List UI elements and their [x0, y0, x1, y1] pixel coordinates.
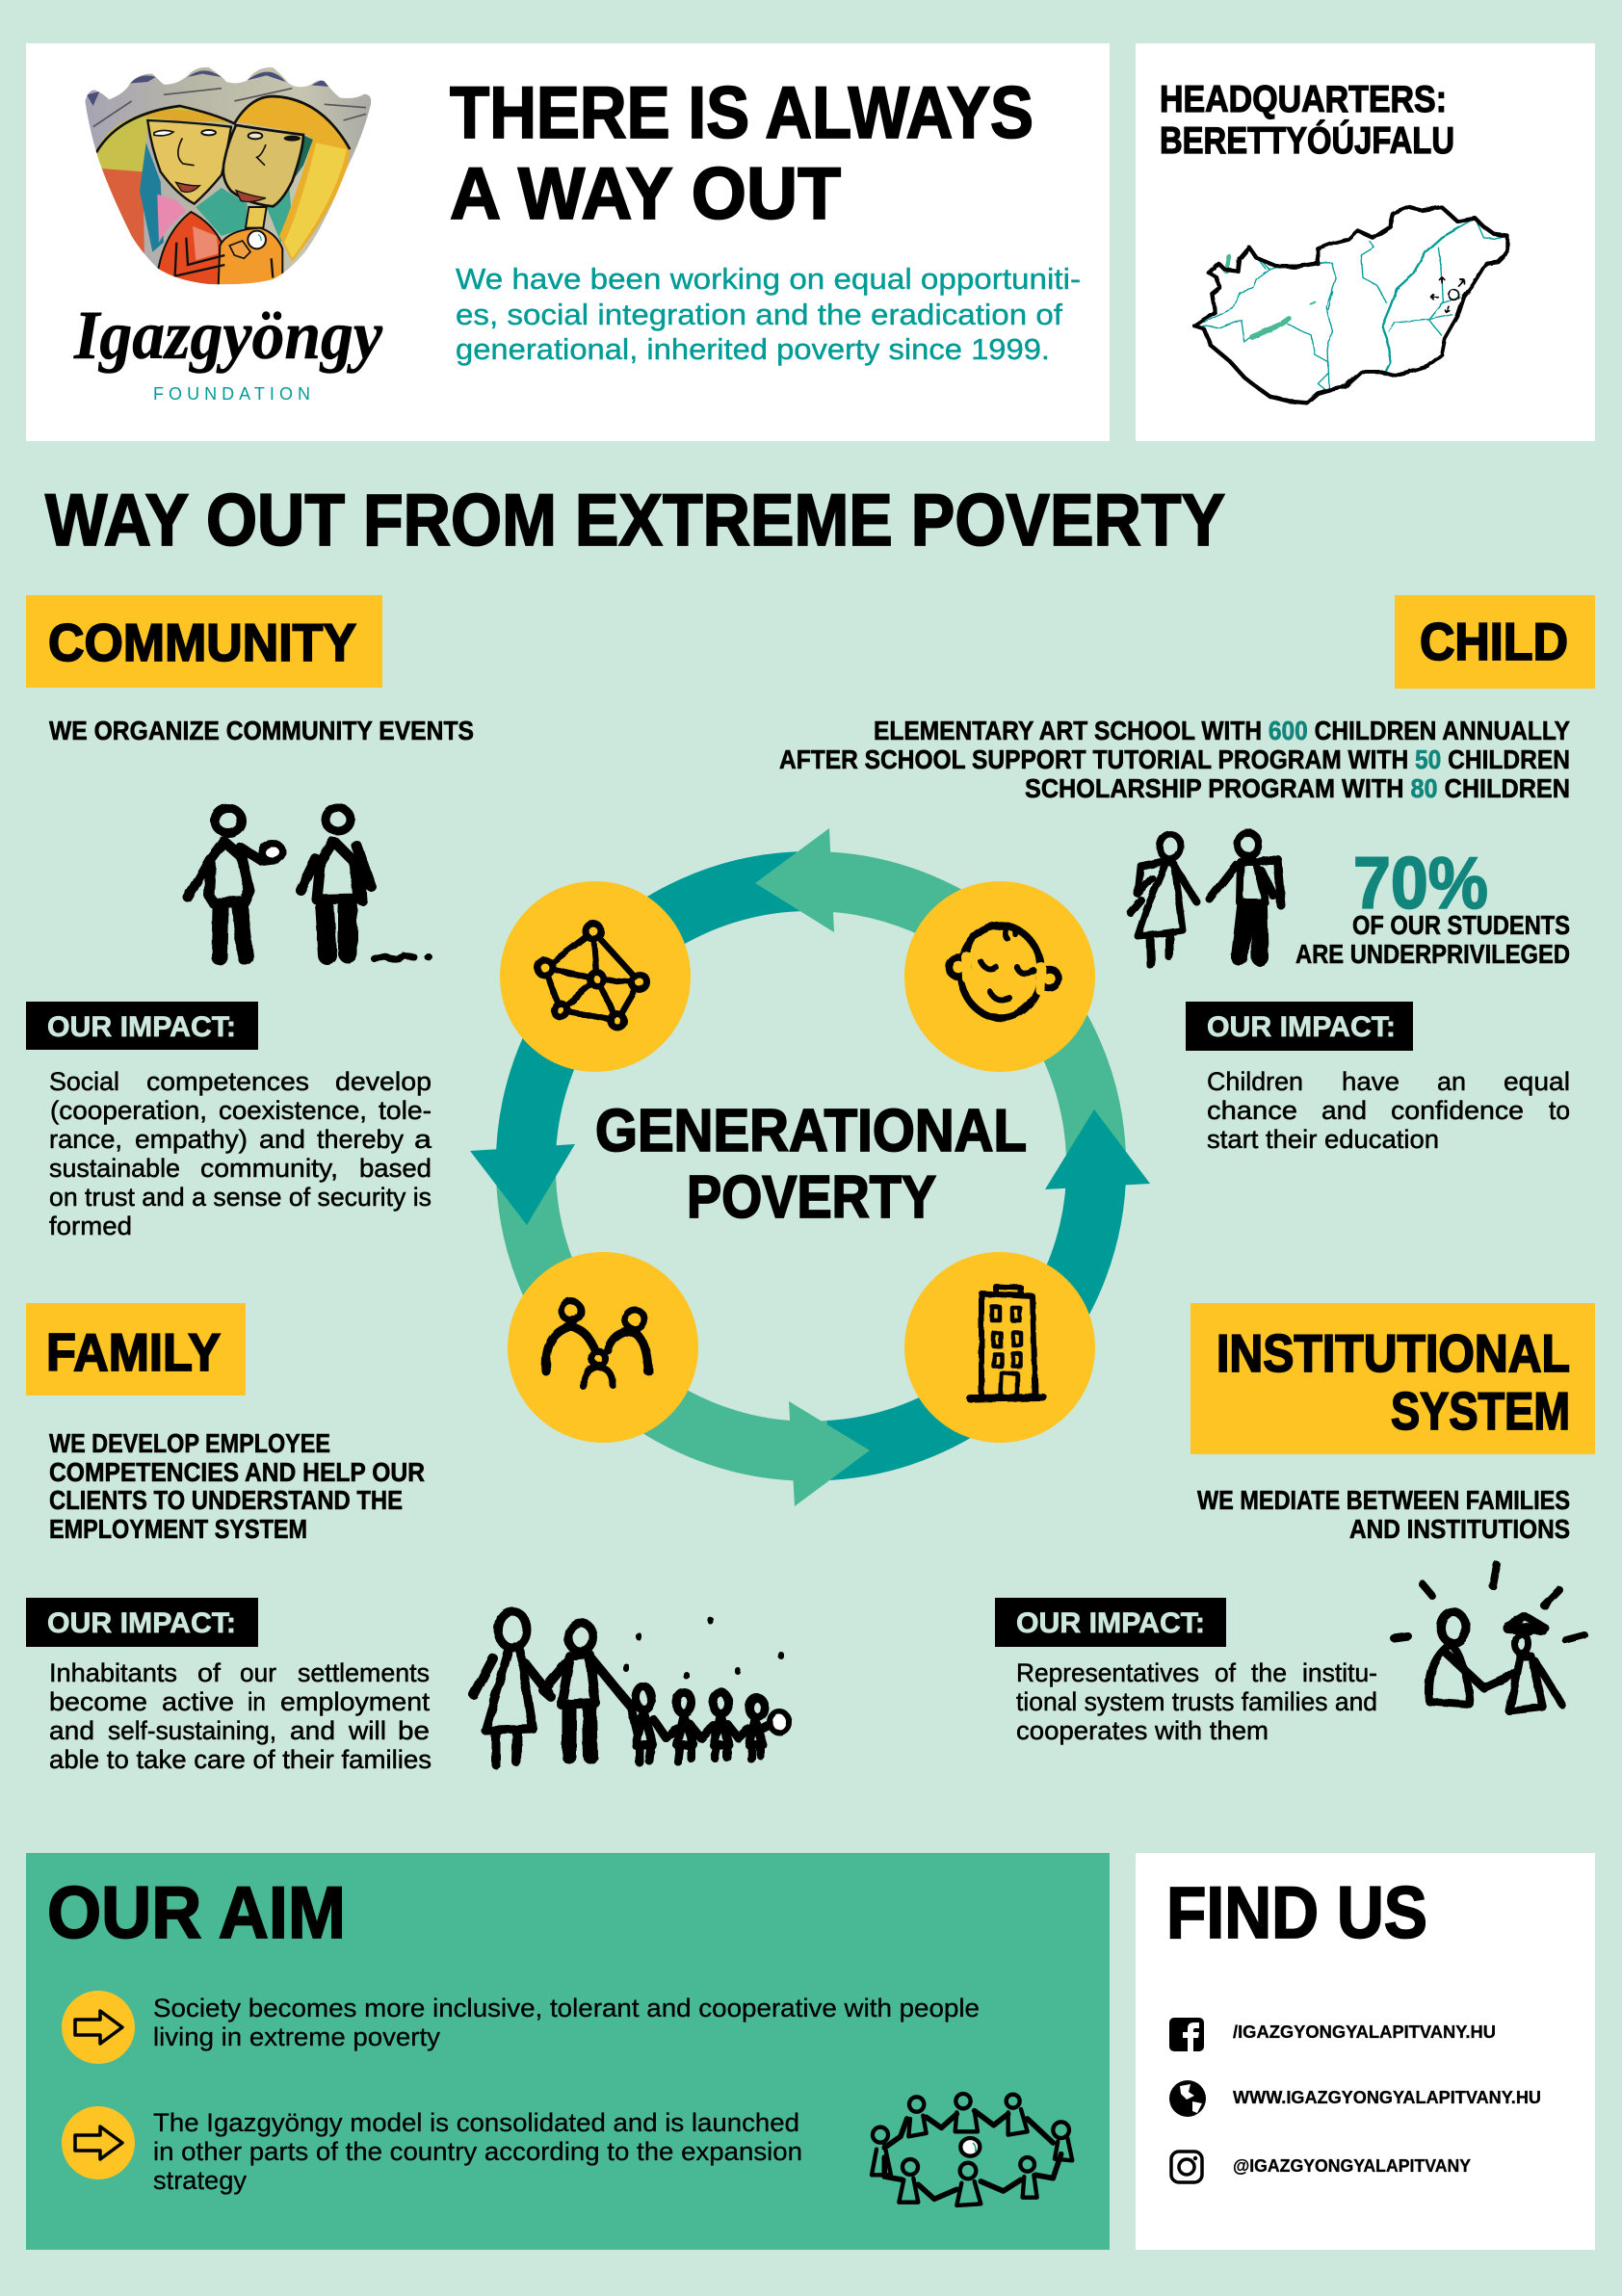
aim item 2	[62, 2106, 802, 2195]
main title: THERE IS ALWAYS	[450, 72, 1033, 154]
impact text: the	[1251, 1658, 1287, 1687]
panel: find us	[1136, 1853, 1595, 2250]
icon: handshake between family and officer	[1394, 1565, 1584, 1711]
impact text: cooperates with them	[1016, 1716, 1269, 1745]
panel: family	[26, 1303, 789, 1774]
impact text: able to take care of their families	[49, 1745, 432, 1774]
family activity	[49, 1428, 425, 1544]
institutional heading: SYSTEM	[1391, 1381, 1570, 1441]
impact text: to	[1549, 1096, 1570, 1125]
logo wordmark: Igazgyöngy	[73, 297, 383, 374]
impact text: empathy)	[135, 1125, 248, 1154]
impact text: settlements	[298, 1658, 430, 1687]
icon: circle of people	[872, 2094, 1072, 2205]
headquarters heading: HEADQUARTERS:	[1160, 79, 1447, 120]
institutional activity	[1197, 1485, 1570, 1544]
institutional activity: AND INSTITUTIONS	[1349, 1514, 1570, 1544]
impact text: Children	[1207, 1067, 1303, 1096]
impact label: OUR IMPACT:	[1207, 1011, 1396, 1043]
institutional heading: INSTITUTIONAL	[1216, 1323, 1570, 1383]
intro text: We have been working on equal opportuniti-	[456, 262, 1081, 296]
impact text: of	[197, 1658, 222, 1687]
intro text: generational, inherited poverty since 1999.	[456, 332, 1050, 366]
intro text: es, social integration and the eradication of	[456, 298, 1062, 331]
impact text: will	[348, 1716, 386, 1745]
node: community	[500, 881, 691, 1072]
impact label	[1186, 1002, 1413, 1051]
node: child	[904, 881, 1095, 1072]
panel: headquarters	[1136, 43, 1595, 441]
impact text: based	[359, 1154, 432, 1183]
impact text: self-sustaining,	[108, 1716, 276, 1745]
main title	[450, 72, 1033, 235]
impact text: and	[1321, 1096, 1367, 1125]
impact text: chance	[1207, 1096, 1297, 1125]
impact text	[1207, 1067, 1570, 1154]
impact text	[49, 1658, 432, 1774]
impact text: and	[259, 1125, 305, 1154]
arrow: top	[755, 828, 834, 932]
impact text: of	[1215, 1658, 1236, 1687]
impact text: confidence	[1391, 1096, 1524, 1125]
contact: instagram	[1171, 2152, 1471, 2182]
impact text: develop	[335, 1067, 432, 1096]
center title	[595, 1098, 1027, 1231]
icon: family holding hands	[474, 1611, 789, 1764]
impact text	[49, 1067, 432, 1240]
contact: instagram: @IGAZGYONGYALAPITVANY	[1233, 2156, 1471, 2176]
impact text: Representatives	[1016, 1658, 1199, 1687]
contact: website	[1169, 2080, 1541, 2117]
intro text	[456, 262, 1081, 366]
arrow: right	[1045, 1109, 1150, 1189]
statistic: OF OUR STUDENTS	[1352, 910, 1570, 940]
child programs with numbers: AFTER SCHOOL SUPPORT TUTORIAL PROGRAM WITH 50 CHILDREN	[779, 744, 1570, 774]
statistic: 70%	[1353, 843, 1488, 925]
family activity: COMPETENCIES AND HELP OUR	[49, 1457, 425, 1487]
family heading	[26, 1303, 246, 1396]
impact text: Inhabitants	[49, 1658, 177, 1687]
impact label: OUR IMPACT:	[47, 1011, 236, 1043]
impact text: tole-	[379, 1096, 432, 1125]
impact text: an	[1437, 1067, 1466, 1096]
chart: generational poverty cycle	[470, 828, 1150, 1506]
main title: A WAY OUT	[450, 153, 841, 235]
center title: GENERATIONAL	[595, 1098, 1027, 1164]
impact text: community,	[200, 1154, 338, 1183]
child programs with numbers: ELEMENTARY ART SCHOOL WITH 600 CHILDREN ANNUALLY	[874, 716, 1570, 745]
panel: header	[26, 43, 1110, 441]
impact text: employment	[280, 1687, 431, 1716]
icon: two people with pearl	[188, 808, 431, 959]
impact text: competences	[146, 1067, 309, 1096]
impact text: and	[290, 1716, 335, 1745]
impact text: (cooperation,	[50, 1096, 207, 1125]
community activity: WE ORGANIZE COMMUNITY EVENTS	[49, 716, 474, 745]
map of Hungary	[1194, 207, 1507, 403]
aim item 1: Society becomes more inclusive, tolerant and cooperative with people	[153, 1994, 980, 2022]
family activity: CLIENTS TO UNDERSTAND THE	[49, 1485, 403, 1515]
aim item 2: The Igazgyöngy model is consolidated and is launched	[153, 2108, 799, 2137]
impact text: and	[49, 1716, 94, 1745]
impact text	[1016, 1658, 1377, 1745]
aim item 2: strategy	[153, 2166, 248, 2195]
headquarters heading: BERETTYÓÚJFALU	[1160, 119, 1454, 162]
headquarters heading	[1160, 79, 1454, 162]
find us heading: FIND US	[1166, 1872, 1427, 1954]
family activity: WE DEVELOP EMPLOYEE	[49, 1428, 330, 1458]
impact text: start their education	[1207, 1125, 1439, 1154]
panel: institutional system	[995, 1303, 1595, 1745]
contact: website: WWW.IGAZGYONGYALAPITVANY.HU	[1233, 2088, 1541, 2107]
institutional heading	[1190, 1303, 1595, 1454]
impact text: sustainable	[49, 1154, 180, 1183]
impact label	[26, 1598, 258, 1647]
statistic	[1295, 843, 1570, 969]
contact: facebook: /IGAZGYONGYALAPITVANY.HU	[1233, 2022, 1496, 2042]
node: institution	[904, 1252, 1095, 1443]
community heading	[26, 595, 382, 688]
impact label: OUR IMPACT:	[47, 1607, 236, 1639]
node: family	[508, 1252, 698, 1443]
impact text: equal	[1504, 1067, 1570, 1096]
statistic: ARE UNDERPRIVILEGED	[1295, 939, 1570, 969]
impact label: OUR IMPACT:	[1016, 1607, 1205, 1639]
panel: community	[26, 595, 474, 1240]
impact text: in	[248, 1687, 266, 1716]
panel: our aim	[26, 1853, 1110, 2250]
impact label	[26, 1002, 258, 1050]
impact text: formed	[49, 1212, 132, 1240]
contact: facebook	[1169, 2018, 1496, 2051]
impact label	[995, 1598, 1226, 1647]
icon: two children with backpacks	[1131, 833, 1281, 965]
impact text: have	[1342, 1067, 1400, 1096]
child programs with numbers: SCHOLARSHIP PROGRAM WITH 80 CHILDREN	[1025, 773, 1570, 803]
impact text: rance,	[49, 1125, 122, 1154]
main heading: WAY OUT FROM EXTREME POVERTY	[45, 480, 1225, 561]
ring segments	[526, 881, 1096, 1451]
impact text: our	[240, 1658, 276, 1687]
arrow: bottom	[789, 1401, 870, 1506]
impact text: be	[398, 1716, 430, 1745]
child heading: CHILD	[1420, 612, 1568, 671]
impact text: a	[414, 1125, 432, 1154]
impact text: institu-	[1302, 1658, 1377, 1687]
logo painting: two faces in a bowl	[80, 63, 376, 287]
center title: POVERTY	[687, 1164, 936, 1231]
aim item 1	[62, 1991, 980, 2064]
impact text: on trust and a sense of security is	[49, 1183, 432, 1212]
community heading: COMMUNITY	[48, 613, 356, 672]
logo subtitle: FOUNDATION	[153, 384, 310, 404]
family activity: EMPLOYMENT SYSTEM	[49, 1514, 307, 1544]
impact text: become	[49, 1687, 147, 1716]
impact text: Social	[49, 1067, 119, 1096]
impact text: tional system trusts families and	[1016, 1687, 1377, 1716]
impact text: active	[162, 1687, 234, 1716]
aim item 2: in other parts of the country according to the expansion	[153, 2137, 802, 2166]
aim item 1: living in extreme poverty	[153, 2022, 441, 2051]
child heading	[1395, 595, 1595, 689]
aim heading: OUR AIM	[47, 1872, 346, 1954]
child programs with numbers	[779, 716, 1570, 803]
family heading: FAMILY	[46, 1322, 221, 1382]
impact text: coexistence,	[219, 1096, 367, 1125]
impact text: thereby	[317, 1125, 404, 1154]
arrow: left	[470, 1144, 575, 1225]
panel: child	[779, 595, 1595, 1154]
